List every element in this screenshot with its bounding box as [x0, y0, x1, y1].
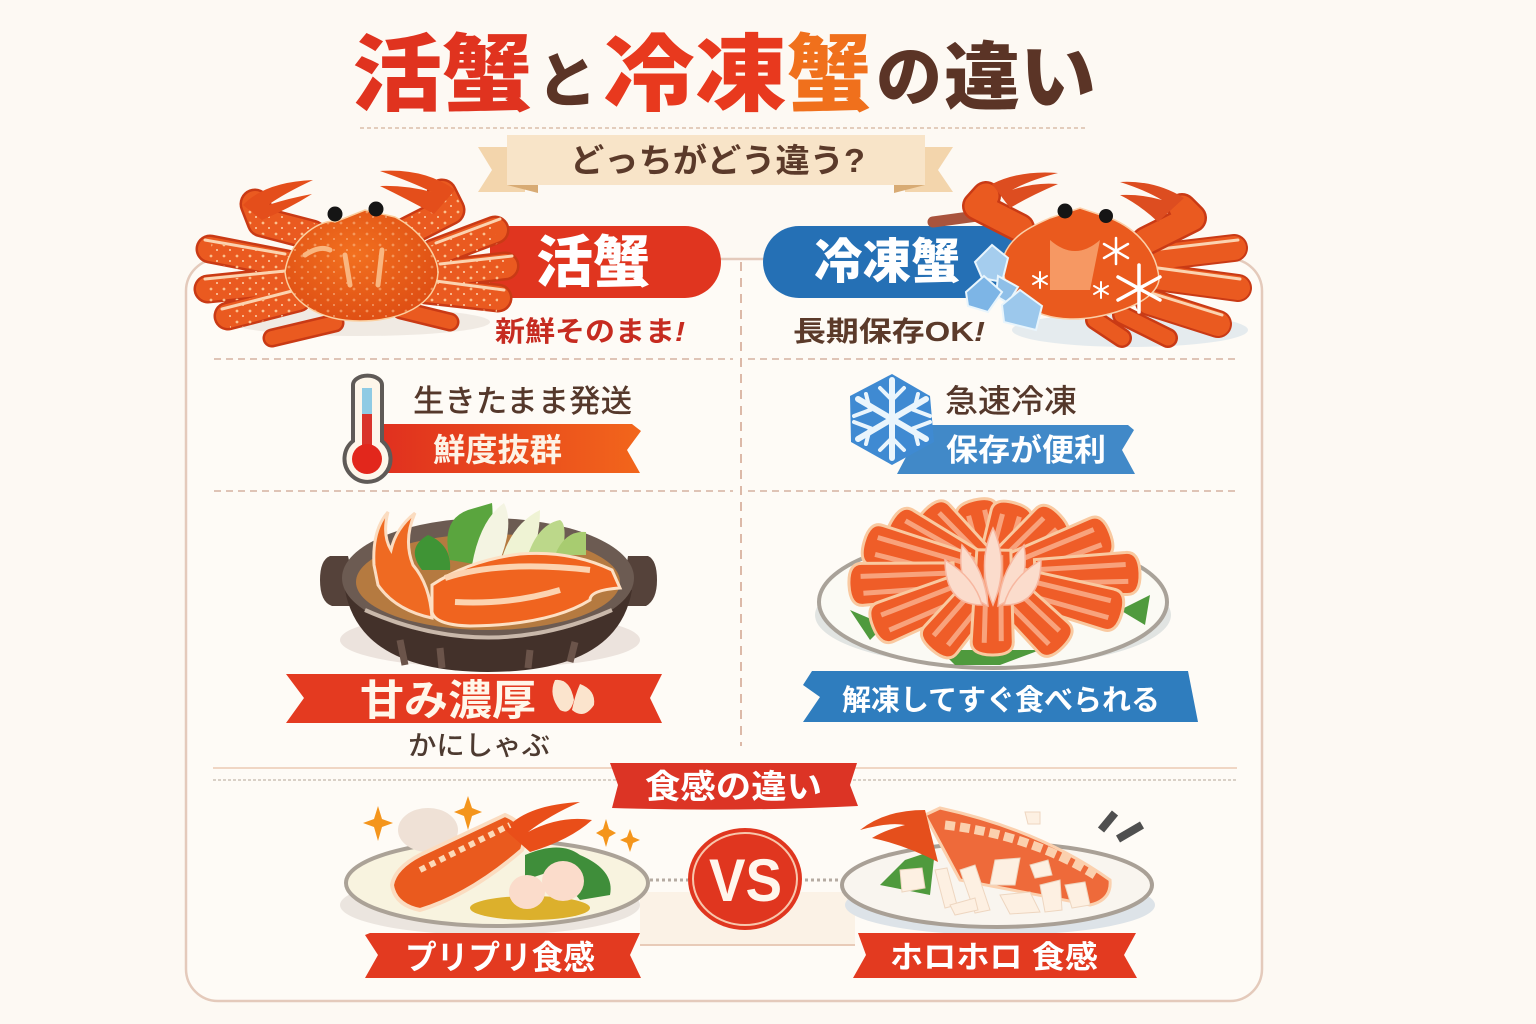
illustration: crab legs plate	[815, 495, 1171, 668]
illustration: frozen crab	[933, 172, 1248, 347]
plate	[819, 536, 1167, 668]
ribbon: flaky texture	[853, 933, 1137, 978]
pill: frozen crab	[763, 226, 1030, 298]
feature: live shipping: 生きたまま発送	[413, 384, 632, 419]
steam puff	[398, 808, 458, 852]
title: 違い	[944, 36, 1096, 119]
tagline: long storage: 長期保存OK !	[793, 316, 985, 347]
plate	[346, 840, 648, 926]
frozen crab legs	[933, 216, 1240, 338]
vs badge	[688, 828, 802, 930]
pot body shading	[400, 640, 575, 668]
ribbon: texture difference: 食感の違い	[645, 768, 822, 805]
ribbon: texture difference	[610, 763, 858, 810]
meat balls	[509, 861, 584, 909]
frost patches	[1050, 240, 1100, 290]
column divider	[740, 262, 742, 746]
ribbon: rich sweetness	[286, 674, 662, 724]
row divider 2	[214, 490, 1237, 492]
pill: live crab: 活蟹	[536, 231, 650, 294]
pot body	[345, 590, 632, 672]
frozen crab shell	[1002, 208, 1159, 319]
flaked meat	[900, 812, 1090, 915]
ribbon: ready after thawing: 解凍してすぐ食べられる	[842, 684, 1160, 717]
pot rim	[342, 518, 634, 638]
vs badge: VS	[709, 847, 782, 914]
title: 冷凍	[603, 28, 787, 122]
ribbon: ready after thawing	[803, 671, 1198, 722]
vegetables	[415, 503, 586, 570]
plate	[842, 843, 1152, 927]
title: 活蟹	[352, 28, 532, 122]
pill: live crab	[490, 226, 721, 298]
vs connector	[650, 878, 838, 882]
crab shell highlights	[305, 248, 382, 285]
crab claw	[392, 802, 592, 910]
ice cubes	[966, 245, 1042, 330]
ribbon: freshness	[380, 424, 641, 473]
title: 蟹	[787, 28, 871, 122]
leaves	[880, 850, 935, 895]
dish name: crab shabu: かにしゃぶ	[408, 731, 550, 761]
pot handles	[320, 556, 657, 606]
ribbon: flaky texture: ホロホロ 食感	[890, 940, 1098, 975]
crab claws	[243, 171, 455, 235]
ribbon: firm texture	[365, 933, 641, 978]
pill: frozen crab: 冷凍蟹	[814, 236, 960, 289]
texture comparison band	[640, 892, 855, 945]
illustration: flaky texture plate	[842, 808, 1155, 935]
title divider	[360, 127, 1088, 129]
crab claw	[860, 808, 1110, 905]
frozen crab eyes	[1058, 204, 1113, 223]
radial crab legs	[848, 495, 1141, 664]
impact marks	[1101, 813, 1142, 839]
ribbon: firm texture: プリプリ食感	[405, 939, 595, 976]
illustration: live crab	[205, 171, 512, 338]
center flower of meat	[945, 528, 1041, 606]
title: の	[876, 40, 942, 114]
frost snowflakes	[1033, 238, 1160, 312]
ribbon: convenient storage: 保存が便利	[946, 433, 1106, 468]
crab back legs	[205, 219, 512, 338]
icon: snowflake	[850, 374, 934, 465]
crab shell speckles	[285, 210, 438, 321]
title: と	[537, 48, 597, 115]
crab shell	[285, 210, 438, 321]
crab eyes	[328, 202, 384, 222]
subtitle banner: どっちがどう違う?	[570, 142, 865, 179]
title	[352, 28, 1096, 122]
ribbon: rich sweetness: 甘み濃厚	[360, 677, 536, 724]
ribbon: freshness: 鮮度抜群	[433, 432, 562, 468]
frozen crab claws	[977, 172, 1192, 241]
ribbon: convenient storage	[897, 425, 1135, 474]
tagline: fresh: 新鮮そのまま !	[495, 316, 685, 347]
leaves	[525, 848, 611, 900]
crab claw in pot	[374, 512, 620, 626]
rim highlight	[365, 610, 612, 638]
feature: quick freezing: 急速冷凍	[945, 383, 1077, 419]
row divider 1	[214, 358, 1237, 360]
sparkles	[363, 796, 640, 852]
main comparison panel	[186, 259, 1262, 1001]
broth	[356, 534, 620, 630]
section divider	[213, 768, 1237, 780]
illustration: firm texture plate	[340, 796, 648, 935]
illustration: hot pot	[320, 503, 657, 672]
icon: shell meat	[552, 680, 594, 714]
garnish leaves	[850, 595, 1150, 665]
icon: thermometer	[344, 376, 390, 482]
sauce	[470, 896, 590, 920]
subtitle banner	[478, 135, 953, 193]
